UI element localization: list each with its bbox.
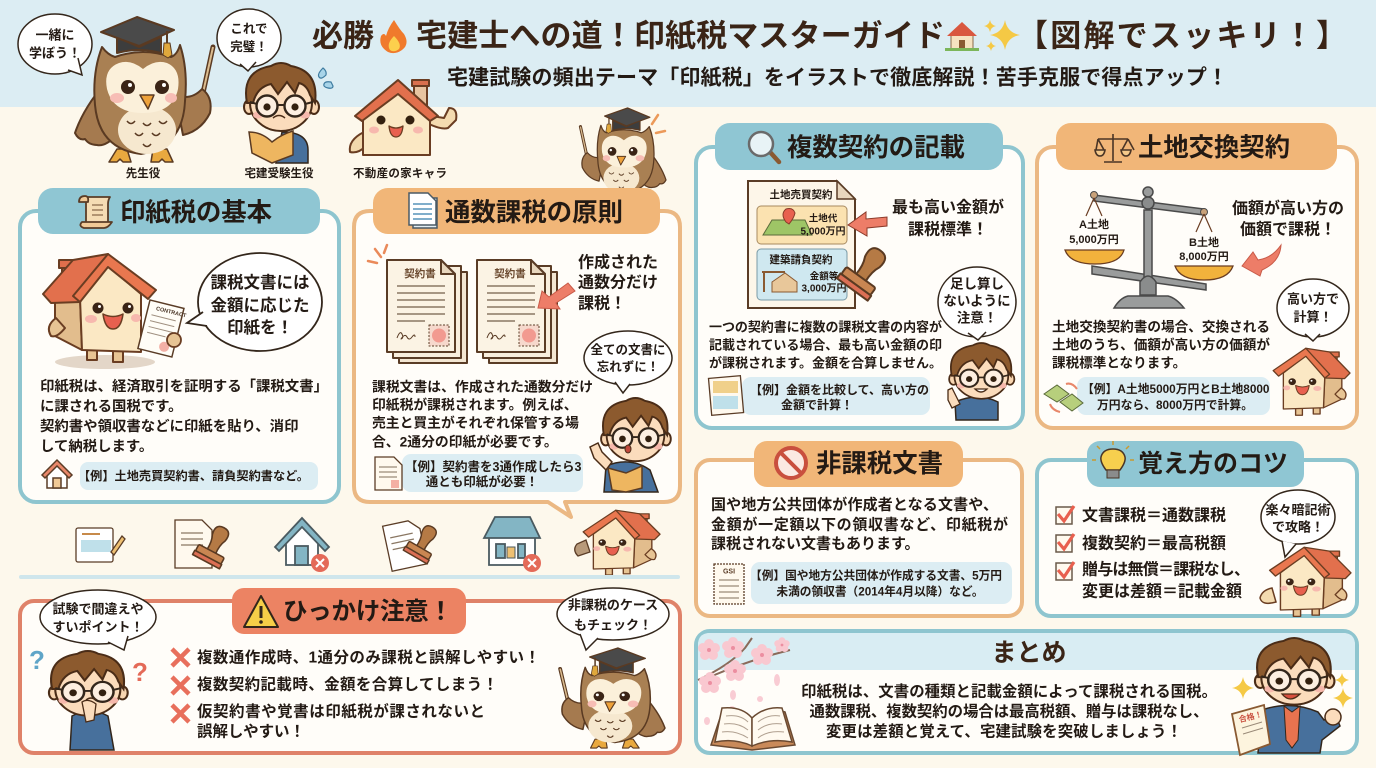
speech bubble: teacher — [18, 14, 92, 75]
heading: 複数契約の記載 — [787, 134, 965, 162]
panel: 覚え方のコツ — [1037, 441, 1357, 616]
example: 【例】A土地5000万円とB土地8000 — [1082, 382, 1270, 396]
impact marks — [368, 245, 387, 263]
example: 通とも印紙が必要！ — [426, 474, 538, 489]
label: student: 宅建受験生役 — [244, 166, 314, 180]
label: house: 不動産の家キャラ — [353, 166, 447, 180]
list: mistakes: 複数契約記載時、金額を合算してしまう！ — [197, 674, 498, 694]
subtitle: 宅建試験の頻出テーマ「印紙税」をイラストで徹底解説！苦手克服で得点アップ！ — [447, 66, 1228, 90]
example — [402, 454, 583, 492]
callout text: 課税標準！ — [908, 220, 988, 238]
callout text: 通数分だけ — [578, 274, 658, 292]
speech bubble: 課税文書: 金額に応じた — [210, 295, 310, 315]
question marks — [29, 645, 148, 687]
speech bubble: student: これで — [230, 22, 268, 36]
character: owl — [560, 648, 665, 748]
question marks: ? — [29, 645, 45, 675]
icon: land exchange — [1044, 384, 1083, 412]
text block: 売主と買主がそれぞれ保管する場 — [372, 414, 579, 430]
question marks: ? — [132, 657, 148, 687]
text block: に課される国税です。 — [40, 398, 182, 415]
text block — [709, 320, 942, 370]
text block: 一つの契約書に複数の課税文書の内容が — [709, 320, 942, 334]
speech bubble: 非課税 — [557, 588, 669, 650]
speech bubble: 足し算: ないように — [943, 294, 1011, 308]
example: 【例】契約書を3通作成したら3 — [405, 459, 581, 474]
text block: 印紙税が課税されます。例えば、 — [372, 396, 578, 412]
illustration: balance scale: 5,000万円 — [1069, 233, 1119, 246]
arrow — [848, 212, 887, 236]
heading — [754, 441, 963, 487]
icon: scales — [1095, 134, 1134, 162]
speech bubble: 課税文書: 課税文書には — [210, 272, 310, 292]
panel: 印紙税の基本 — [20, 188, 339, 502]
speech bubble: 非課税: もチェック！ — [574, 618, 652, 632]
speech bubble: 間違えやすい: 試験で間違えや — [52, 602, 144, 616]
title — [312, 18, 1347, 54]
icon: contract thumbnail — [708, 376, 744, 415]
checklist: 複数契約＝最高税額 — [1082, 534, 1226, 552]
callout text — [1232, 198, 1344, 238]
icon: light bulb — [1092, 441, 1134, 478]
text block: 土地交換契約書の場合、交換される — [1052, 318, 1270, 334]
illustration: contract document: 5,000万円 — [800, 226, 846, 238]
heading — [232, 588, 466, 634]
illustration: balance scale: 8,000万円 — [1179, 250, 1229, 263]
list: mistakes — [172, 648, 540, 740]
panel: 土地交換契約 — [1037, 123, 1357, 428]
speech bubble: 間違えやすい — [40, 590, 156, 650]
icon: small house — [42, 460, 72, 488]
character: small owl — [580, 108, 666, 198]
text block: 記載されている場合、最も高い金額の印 — [709, 338, 942, 352]
example — [750, 562, 1012, 604]
illustration: stacked contracts 1: 契約書 — [404, 267, 436, 280]
example — [1077, 377, 1270, 415]
icon: form with pencil — [76, 528, 125, 562]
speech bubble: 楽々暗記術: 楽々暗記術 — [1265, 502, 1331, 518]
heading — [1087, 441, 1304, 487]
speech bubble: 課税文書: 印紙を！ — [227, 317, 293, 337]
character: teacher owl — [18, 14, 213, 180]
speech bubble: 高い方で: 高い方で — [1287, 292, 1339, 306]
checklist: 変更は差額＝記載金額 — [1082, 582, 1242, 600]
icon: sparkles — [984, 20, 1020, 51]
character: student — [217, 9, 333, 180]
header band — [0, 0, 1376, 107]
text block — [711, 496, 1008, 552]
example: 【例】国や地方公共団体が作成する文書、5万円 — [750, 568, 1002, 582]
example: 未満の領収書（2014年4月以降）など。 — [776, 584, 984, 598]
summary text — [801, 682, 1217, 740]
illustration: contract document: 建築請負契約 — [770, 253, 832, 266]
example: 万円なら、8000万円で計算。 — [1097, 398, 1253, 412]
heading — [373, 188, 660, 234]
speech bubble: 足し算: 注意！ — [957, 310, 997, 326]
character: student pointing — [590, 398, 671, 492]
heading: 覚え方のコツ — [1138, 450, 1288, 478]
text block: 課税されない文書もあります。 — [711, 534, 920, 552]
illustration: contract document: 土地売買契約 — [770, 188, 832, 201]
heading: 通数課税の原則 — [445, 199, 623, 227]
arrow — [1242, 245, 1281, 276]
text block: 課税文書は、作成された通数分だけ — [372, 378, 593, 394]
heading — [715, 123, 1003, 170]
illustration: contract document: 金額等 — [810, 270, 839, 282]
summary text: 変更は差額と覚えて、宅建試験を突破しましょう！ — [826, 722, 1182, 740]
panel: 複数契約の記載 — [696, 123, 1023, 428]
heading — [1056, 123, 1337, 170]
character: house — [1273, 348, 1350, 415]
speech bubble: student: 完璧！ — [230, 39, 268, 54]
icon: magnifier — [749, 132, 779, 162]
speech bubble: 足し算 — [938, 267, 1016, 340]
icon: building crossed — [484, 517, 541, 572]
illustration: contract document: 3,000万円 — [801, 282, 847, 294]
illustration: stacked contracts 1 — [387, 260, 467, 363]
icon: scroll — [79, 196, 112, 228]
text block: 土地のうち、価額が高い方の価額が — [1052, 336, 1270, 352]
heading: ひっかけ注意！ — [283, 598, 453, 626]
panel: 非課税文書 — [696, 441, 1022, 616]
panel: まとめ — [696, 631, 1357, 755]
text block: 印紙税は、経済取引を証明する「課税文書」 — [40, 377, 328, 395]
heading: 非課税文書 — [816, 450, 943, 478]
speech bubble: 楽々暗記術: で攻略！ — [1272, 520, 1324, 534]
panel: ひっかけ注意 — [20, 588, 680, 753]
illustration: contract document — [748, 181, 855, 308]
example: 金額で計算！ — [781, 397, 853, 412]
arrow — [538, 283, 575, 309]
icon: tilted document with stamp — [383, 519, 444, 571]
icon: warning — [244, 596, 278, 627]
illustration: open book — [711, 708, 795, 750]
icon: house emoji — [945, 22, 979, 51]
character: house — [350, 80, 456, 180]
icon row — [76, 510, 660, 575]
speech bubble: 高い方で: 計算！ — [1293, 310, 1333, 324]
callout text: 最も高い金額が — [892, 198, 1004, 216]
summary text: 通数課税、複数契約の場合は最高税額、贈与は課税なし、 — [810, 702, 1208, 720]
text block: して納税します。 — [40, 438, 153, 455]
title: 【図解でスッキリ！】 — [1017, 18, 1347, 54]
text block: 合、2通分の印紙が必要です。 — [372, 434, 558, 450]
illustration: contract document: 土地代 — [809, 212, 838, 224]
label: teacher: 先生役 — [126, 166, 161, 180]
character: house waving — [575, 510, 660, 575]
example: 【例】金額を比較して、高い方の — [750, 382, 929, 397]
heading: 土地交換契約 — [1138, 134, 1290, 162]
character: house with thumb — [1260, 547, 1351, 616]
callout text — [892, 198, 1004, 238]
text block: 国や地方公共団体が作成者となる文書や、 — [711, 496, 998, 514]
icon: stamp — [837, 239, 896, 301]
character: student with certificate — [1232, 638, 1353, 755]
speech bubble: 高い方で — [1277, 279, 1349, 341]
list: mistakes: 仮契約書や覚書は印紙税が課されないと — [197, 702, 485, 720]
list: mistakes: 複数通作成時、1通分のみ課税と誤解しやすい！ — [197, 648, 540, 666]
illustration: balance scale — [1065, 187, 1233, 308]
illustration: house with document — [43, 254, 187, 369]
illustration: stacked contracts 2: 契約書 — [494, 267, 526, 280]
checklist: 文書課税＝通数課税 — [1082, 506, 1226, 524]
checklist — [1056, 506, 1250, 600]
divider — [19, 575, 680, 579]
speech bubble: 全ての文書に: 全ての文書に — [590, 342, 666, 357]
title: 必勝 — [312, 18, 374, 54]
text block — [1052, 318, 1270, 370]
illustration: balance scale: B土地 — [1189, 235, 1219, 249]
example — [742, 377, 930, 415]
speech bubble: 間違えやすい: すいポイント！ — [52, 620, 144, 634]
panel: 非課税文書: GSI — [723, 568, 735, 576]
callout text: 課税！ — [578, 294, 626, 312]
speech bubble: 足し算: 足し算し — [950, 276, 1004, 292]
character: student — [948, 343, 1014, 420]
speech bubble: 非課税: 非課税のケース — [568, 598, 658, 612]
speech bubble: student — [217, 9, 281, 71]
speech bubble: teacher: 一緒に — [35, 28, 75, 42]
speech bubble: 課税文書 — [187, 253, 322, 351]
speech bubble: teacher: 学ぼう！ — [29, 46, 81, 60]
text block: 契約書や領収書などに印紙を貼り、消印 — [40, 417, 298, 435]
text block — [372, 378, 593, 450]
icon: house crossed — [275, 518, 329, 572]
summary text: 印紙税は、文書の種類と記載金額によって課税される国税。 — [801, 682, 1217, 700]
heading — [38, 188, 320, 234]
callout text — [578, 252, 658, 312]
icon: flame — [380, 20, 407, 53]
icon: document small — [375, 457, 402, 490]
icon: prohibited — [776, 448, 806, 478]
illustration: house with document: CONTRACT — [155, 306, 187, 320]
callout text: 価額で課税！ — [1240, 220, 1336, 238]
speech bubble: 全ての文書に — [584, 331, 672, 393]
icon: document — [409, 193, 437, 228]
example — [78, 462, 318, 490]
character: student thinking — [29, 645, 148, 750]
illustration: stacked contracts 2 — [477, 260, 557, 363]
text block: が課税されます。金額を合算しません。 — [709, 356, 942, 370]
illustration: cherry blossoms — [698, 637, 790, 725]
callout text: 作成された — [578, 252, 658, 272]
icon: receipt — [714, 564, 744, 604]
panel: 通数課税の原則 — [354, 188, 680, 517]
title: 宅建士への道！印紙税マスターガイド — [416, 18, 945, 54]
list: mistakes: 誤解しやすい！ — [197, 722, 305, 740]
text block — [40, 377, 328, 455]
heading: 印紙税の基本 — [120, 199, 272, 227]
speech bubble: 楽々暗記術 — [1261, 490, 1335, 557]
example: 【例】土地売買契約書、請負契約書など。 — [78, 468, 309, 483]
character: student with certificate: 合格！ — [1238, 709, 1263, 724]
callout text: 価額が高い方の — [1232, 198, 1344, 218]
text block: 課税標準となります。 — [1052, 354, 1186, 370]
illustration: balance scale: A土地 — [1079, 217, 1109, 231]
speech bubble: 全ての文書に: 忘れずに！ — [597, 359, 659, 374]
heading: まとめ — [992, 639, 1066, 667]
text block: 金額が一定額以下の領収書など、印紙税が — [711, 516, 1008, 534]
icon: document with stamp — [175, 520, 237, 569]
checklist: 贈与は無償＝課税なし、 — [1082, 560, 1250, 578]
